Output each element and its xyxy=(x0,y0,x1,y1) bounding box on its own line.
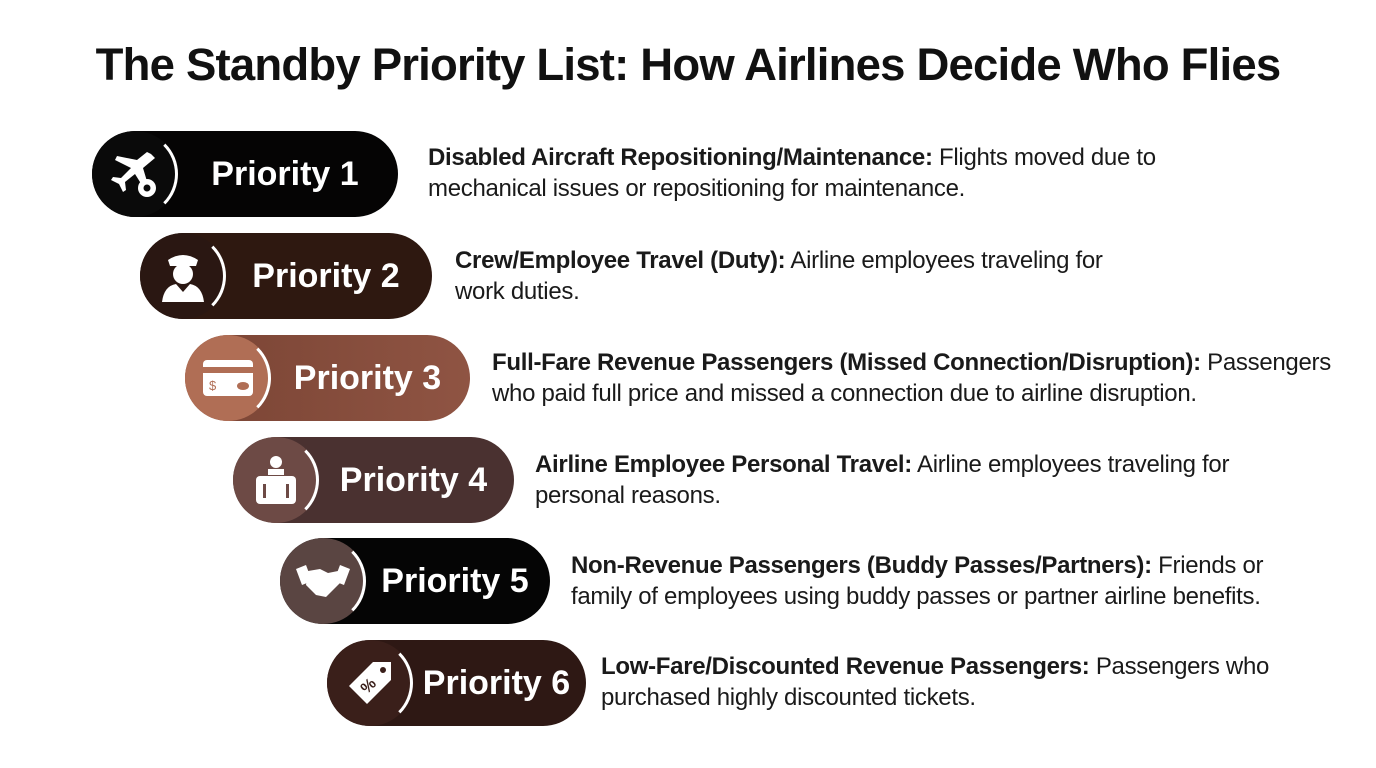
text: priority 2: Crew/Employee Travel (Duty): Airline employees traveling for xyxy=(455,247,1103,274)
pill: priority 2: Priority 2 xyxy=(252,257,400,295)
text: priority 4: personal reasons. xyxy=(535,482,721,509)
icon: pilot xyxy=(140,233,226,319)
text: priority 3: who paid full price and missed a connection due to airline disruption. xyxy=(492,380,1197,407)
icon: person with luggage xyxy=(233,437,319,523)
pill: priority 3: Priority 3 xyxy=(294,359,441,397)
text: priority 2 xyxy=(455,247,1103,305)
text: priority 2: work duties. xyxy=(455,278,579,305)
text: priority 4 xyxy=(535,451,1230,509)
text: priority 1: mechanical issues or repositioning for maintenance. xyxy=(428,175,965,202)
pill: priority 2 xyxy=(140,233,432,319)
icon: plane with gear xyxy=(92,131,178,217)
text: priority 4: Airline Employee Personal Travel: Airline employees traveling for xyxy=(535,451,1229,478)
icon: discount tag: % xyxy=(358,675,380,697)
text: priority 1: Disabled Aircraft Repositioning/Maintenance: Flights moved due to xyxy=(428,144,1156,171)
pill: priority 5: Priority 5 xyxy=(381,562,529,600)
text: priority 3 xyxy=(492,349,1331,407)
text: priority 6: purchased highly discounted tickets. xyxy=(601,684,976,711)
pill: priority 4: Priority 4 xyxy=(340,461,487,499)
text: priority 6 xyxy=(601,653,1269,711)
icon: credit card: $ xyxy=(209,378,217,393)
pill: priority 1 xyxy=(92,131,398,217)
text: priority 5: Non-Revenue Passengers (Buddy Passes/Partners): Friends or xyxy=(571,552,1263,579)
icon: discount tag xyxy=(327,640,413,726)
text: priority 1 xyxy=(428,144,1156,202)
icon: handshake xyxy=(280,538,366,624)
pill: priority 6: Priority 6 xyxy=(423,664,570,702)
icon: credit card xyxy=(185,335,271,421)
pill: priority 3 xyxy=(185,335,470,421)
text: priority 5: family of employees using buddy passes or partner airline benefits. xyxy=(571,583,1261,610)
pill: priority 4 xyxy=(233,437,514,523)
pill: priority 6 xyxy=(327,640,586,726)
text: priority 3: Full-Fare Revenue Passengers (Missed Connection/Disruption): Passengers xyxy=(492,349,1331,376)
text: priority 5 xyxy=(571,552,1264,610)
pill: priority 1: Priority 1 xyxy=(211,155,359,193)
text: priority 6: Low-Fare/Discounted Revenue Passengers: Passengers who xyxy=(601,653,1269,680)
title: The Standby Priority List: How Airlines Decide Who Flies xyxy=(96,39,1280,90)
pill: priority 5 xyxy=(280,538,550,624)
